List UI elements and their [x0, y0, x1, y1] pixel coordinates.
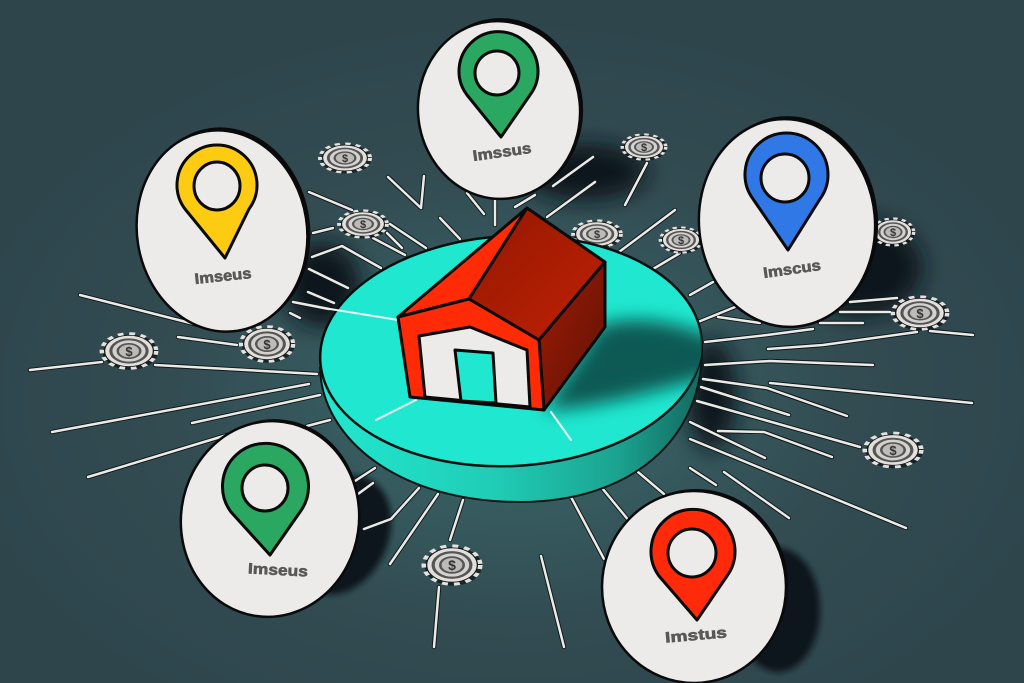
coin gears: $	[594, 229, 600, 241]
left roof	[398, 208, 527, 317]
pin icon	[222, 443, 308, 555]
house shadow	[544, 320, 730, 410]
coin gears: $	[263, 337, 271, 352]
disc top	[314, 226, 708, 476]
door	[455, 350, 496, 403]
coin gears: $	[342, 153, 348, 165]
disc ticks	[330, 309, 571, 440]
right roof	[469, 208, 605, 340]
pin icon	[177, 145, 257, 258]
label: Imseus	[248, 560, 308, 581]
coin gears: $	[125, 344, 133, 359]
pin icon	[459, 32, 538, 137]
label: Imssus	[472, 140, 532, 165]
disc side	[320, 345, 702, 502]
bubble: left yellow pin	[122, 115, 325, 344]
bubble: bottom-right red pin	[602, 489, 788, 683]
bubble: bottom-left green pin	[168, 408, 373, 628]
label: Imseus	[194, 265, 252, 288]
pin icon	[651, 509, 735, 620]
side wall	[539, 262, 605, 410]
coin gears: $	[448, 557, 456, 573]
coin gears: $	[641, 142, 647, 154]
label: Imscus	[762, 257, 822, 282]
coin gears: $	[678, 235, 684, 247]
drop shadows	[274, 144, 922, 672]
coin gears: $	[360, 219, 366, 231]
pin icon	[745, 133, 828, 250]
central teal disc	[318, 236, 704, 503]
coin gears: $	[889, 443, 897, 458]
bubble: right blue pin	[690, 109, 887, 334]
coin gears: $	[916, 306, 924, 321]
coin gears	[103, 135, 949, 586]
front wall	[398, 299, 544, 410]
front opening	[419, 327, 530, 407]
radiating lines	[30, 157, 973, 647]
red house	[398, 208, 605, 410]
coin gears: $	[890, 227, 896, 239]
bubble: top green pin	[409, 10, 592, 207]
label: Imstus	[664, 624, 728, 647]
